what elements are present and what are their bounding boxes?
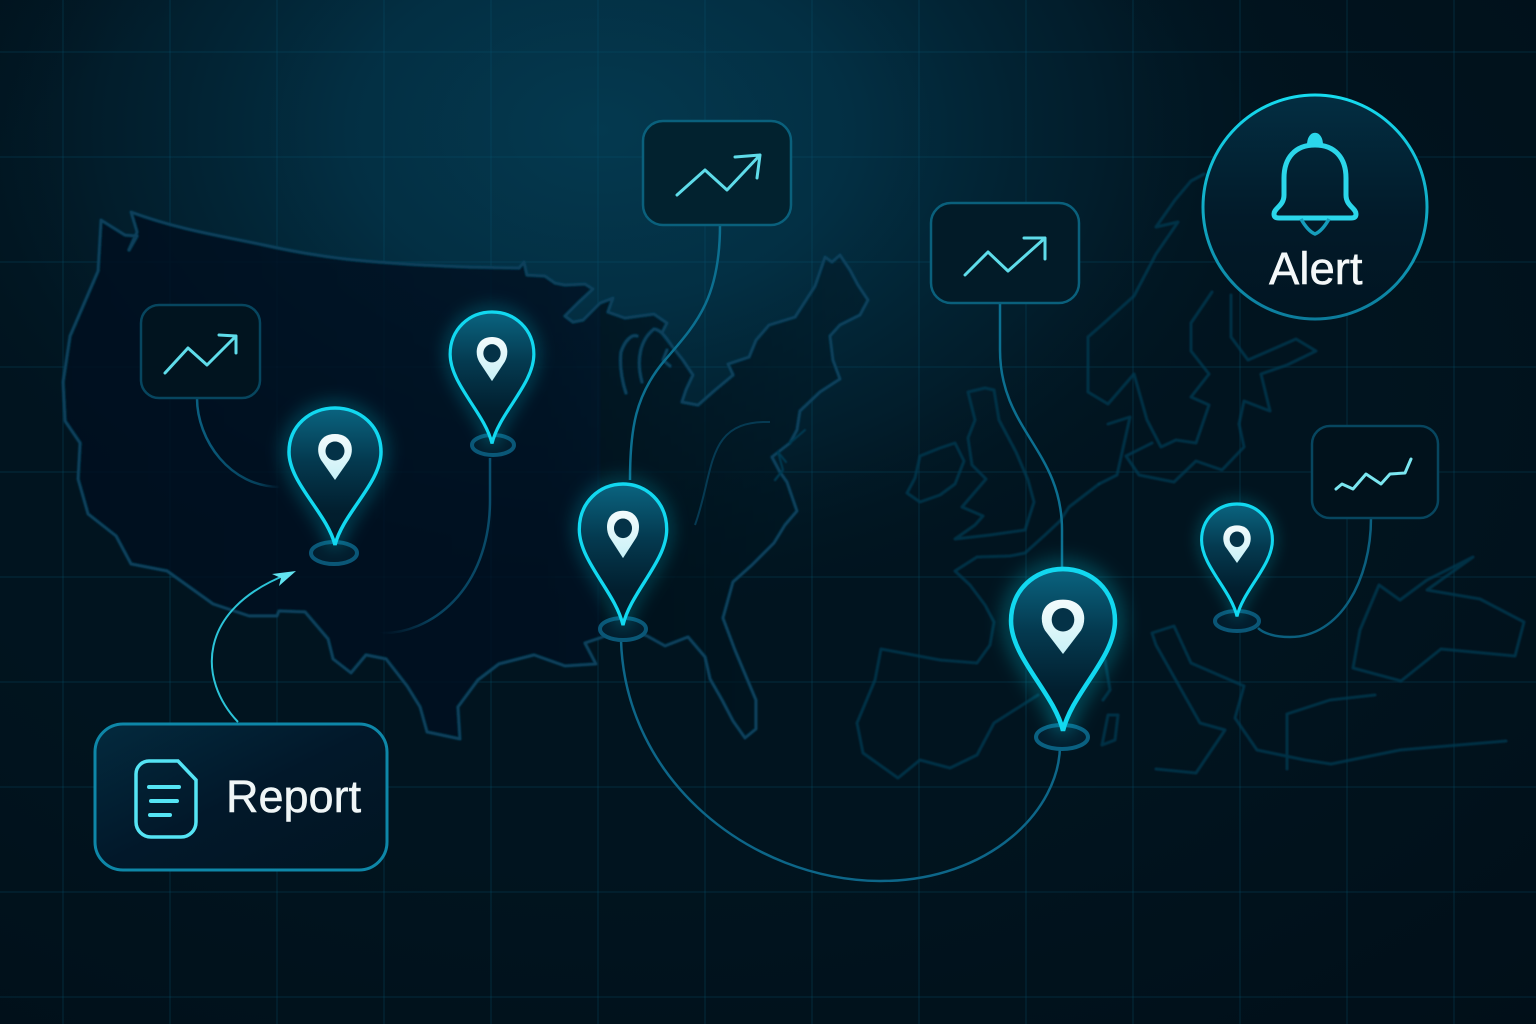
panel: alert badge	[1203, 95, 1427, 319]
pin: east europe	[1202, 504, 1272, 631]
connector: pin north to south	[380, 458, 490, 633]
chart box: far right	[1312, 426, 1438, 518]
label: alert: Alert	[1269, 243, 1363, 294]
map: north america	[63, 212, 868, 739]
connector: arc between pins	[621, 640, 1060, 881]
connector: top chart to central pin	[630, 225, 720, 480]
panel: report button	[95, 724, 387, 870]
icon: document	[136, 761, 196, 837]
connector: chart to large pin	[1000, 303, 1062, 570]
label: report: Report	[226, 771, 362, 822]
connector: right chart to pin	[1258, 518, 1371, 637]
icon: bell	[1274, 134, 1356, 234]
connector: faint curve	[695, 422, 770, 525]
chart box: west	[141, 305, 260, 398]
map: europe	[857, 174, 1524, 778]
pin: central	[579, 484, 667, 640]
pin: west	[289, 408, 381, 564]
chart box: top	[643, 121, 791, 225]
pin: large europe	[1011, 569, 1115, 749]
connector: box to pin west	[197, 398, 280, 487]
connector: report arrow	[212, 571, 296, 722]
pin: north	[450, 312, 534, 455]
chart box: centre right	[931, 203, 1079, 303]
